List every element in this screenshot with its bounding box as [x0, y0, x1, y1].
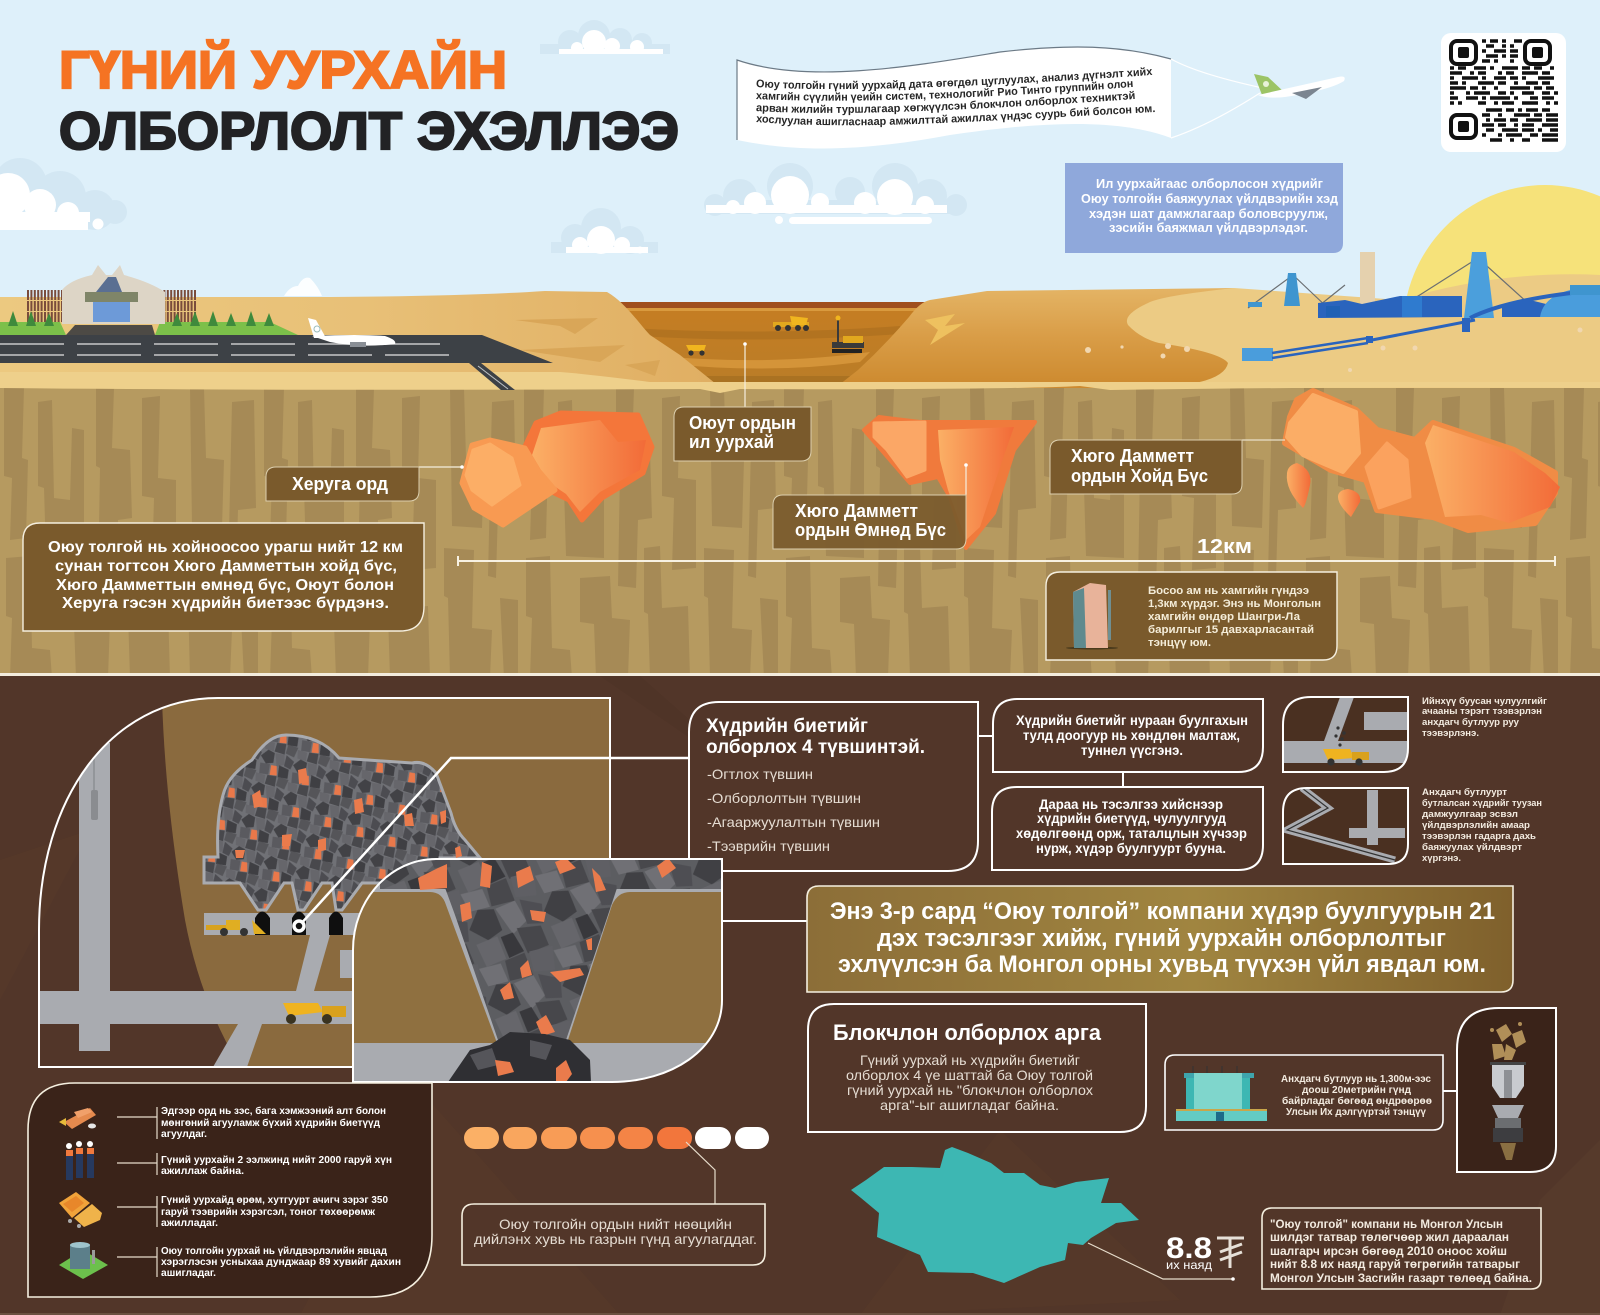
text box: shaft depth [1046, 572, 1337, 660]
text box: 12 km summary: Оюу толгой нь хойноосоо урагш нийт 12 км [48, 539, 403, 556]
sky background [0, 0, 1600, 400]
text box: top taxpayer: шалгарч ирсэн бөгөөд 2010 оноос хойш [1270, 1244, 1507, 1258]
text box: share underground: Оюу толгойн ордын нийт нөөцийн [499, 1216, 732, 1232]
icon: pit drill [832, 316, 864, 353]
mini panel: conveyor [1283, 788, 1408, 864]
panel: four levels: -Олборлолтын түвшин [707, 790, 861, 806]
panel: inset of drawpoint [353, 858, 722, 1082]
text box: top taxpayer: Монгол Улсын Засгийн газарт төлөөд байна. [1270, 1271, 1532, 1285]
separator line [0, 673, 1600, 676]
icon: underground haul truck [283, 1003, 346, 1024]
icon: workers [66, 1141, 94, 1180]
icon: copper ingots [59, 1108, 96, 1129]
text box: 12 km summary [23, 523, 424, 631]
processing plant [1248, 252, 1600, 318]
caption: loading: анхдагч бутлуур руу [1422, 716, 1520, 727]
callout: concentrator note [1065, 163, 1343, 253]
highlight box: historic event: эхлүүлсэн ба Монгол орны хувьд түүхэн үйл явдал юм. [838, 951, 1486, 978]
icon: state department store [1176, 1066, 1267, 1121]
text box: 12 km summary: Херуга гэсэн хүдрийн биетээс бүрдэнэ. [62, 595, 389, 612]
text box: primary crusher: байрладаг бөгөөд өндрөөрөө [1282, 1096, 1432, 1107]
icon: dump truck [59, 1192, 102, 1228]
text box: undercut tunnel: Хүдрийн биетийг нураан буулгахын [1016, 713, 1248, 728]
sun [1403, 185, 1600, 475]
label: Hugo Dummett South: Хюго Дамметт [795, 501, 918, 521]
text box: shaft depth: барилгыг 15 давхарласантай [1148, 624, 1314, 636]
row: vehicles: ажилладаг. [161, 1218, 218, 1229]
text box: blasting: Дараа нь тэсэлгээ хийснээр [1039, 797, 1223, 812]
underground soil [0, 388, 1600, 673]
text box: top taxpayer: нийт 8.8 их наяд гаруй төгрөгийн татварыг [1270, 1257, 1520, 1271]
open pit [605, 302, 925, 390]
right light sand [1090, 274, 1600, 392]
caption: conveyor: хүргэнэ. [1422, 852, 1461, 863]
panel: crusher [1457, 1008, 1556, 1172]
text box: 12 km summary: сунан тогтсон Хюго Дамметтын хойд бүс, [55, 558, 397, 575]
row: workforce: Гүний уурхайн 2 ээлжинд нийт 2000 гаруй хүн [161, 1155, 392, 1166]
label: Oyut open pit [674, 342, 811, 461]
caption: conveyor [1422, 786, 1542, 863]
text box: 12 km summary: Хюго Дамметтын өмнөд бүс, Оюут болон [56, 577, 394, 594]
text box: undercut tunnel [993, 699, 1263, 772]
title: ГҮНИЙ УУРХАЙН [59, 39, 507, 100]
panel: four levels: олборлох 4 түвшинтэй. [706, 737, 925, 758]
soil [162, 698, 610, 1067]
row: copper gold [117, 1105, 386, 1140]
hill bolt scar [925, 314, 965, 345]
ground strip above soil [0, 372, 726, 392]
callout: concentrator note: Оюу толгойн баяжуулах үйлдвэрийн хэд [1081, 192, 1338, 206]
banner text: Оюу толгойн гүний уурхайд дата өгөгдөл цуглуулах, анализ дүгнэлт хийх [756, 67, 1152, 92]
panel: four levels: -Агааржуулалтын түвшин [707, 814, 880, 830]
ore cave [204, 735, 480, 910]
icon: pit loader [773, 316, 809, 331]
text box: primary crusher: Анхдагч бутлуур нь 1,300м-ээс [1281, 1074, 1432, 1085]
text box: block caving: арга"-ыг ашигладаг байна. [880, 1097, 1059, 1113]
caption: conveyor: бутлалсан хүдрийг туузан [1422, 797, 1542, 808]
text box: shaft depth: 1,3км хүрдэг. Энэ нь Монголын [1148, 598, 1321, 610]
chart: eight pills, six filled [464, 1127, 769, 1149]
cloud: lower centre [551, 208, 658, 254]
callout: link lines [294, 736, 1123, 931]
title: ОЛБОРЛОЛТ ЭХЭЛЛЭЭ [59, 102, 679, 161]
label: Hugo Dummett South [773, 463, 968, 549]
callout: concentrator note: хэдэн шат дамжлагаар боловсруулж, [1089, 207, 1328, 221]
text box: top taxpayer: шилдэг татвар төлөгчөөр жил дараалан [1270, 1230, 1509, 1244]
icon: water recycling tank [59, 1242, 108, 1279]
caption: conveyor: тээвэрлэн гадарга дахь [1422, 830, 1536, 841]
panel: four levels: Хүдрийн биетийг [706, 716, 868, 737]
row: copper gold: мөнгөний агууламж бүхий хүдрийн биетүүд [161, 1117, 381, 1129]
banner text [756, 67, 1155, 128]
hoist [91, 758, 98, 820]
panel: four levels: -Тээврийн түвшин [707, 838, 830, 854]
text box: shaft depth: Босоо ам нь хамгийн гүндээ [1148, 585, 1309, 597]
text box: block caving [808, 1004, 1146, 1132]
highlight box: historic event [807, 886, 1513, 992]
icon: tugrik sign [1217, 1238, 1244, 1268]
highlight box: historic event: Энэ 3-р сард “Оюу толгой” компани хүдэр буулгуурын 21 [830, 898, 1495, 925]
label: Hugo Dummett North: Хюго Дамметт [1071, 446, 1194, 466]
text box: block caving: олборлох 4 үе шаттай ба Оюу толгой [846, 1067, 1093, 1083]
highlight box: historic event: дэх тэсэлгээг хийж, гүний уурхайн олборлолтыг [877, 925, 1446, 952]
label: Heruga [266, 465, 464, 501]
mini panel: loading truck [1283, 697, 1408, 772]
caption: conveyor: Анхдагч бутлуурт [1422, 786, 1507, 797]
QR code [1441, 33, 1566, 152]
text box: top taxpayer: "Оюу толгой" компани нь Монгол Улсын [1270, 1217, 1503, 1231]
label: Hugo Dummett North [1050, 440, 1285, 494]
callout: 8.8 trillion: их наяд [1166, 1258, 1212, 1272]
terminal building with grass [0, 265, 298, 335]
row: water reuse: хэрэглэсэн усныхаа дунджаар 89 хувийг дахин [161, 1257, 401, 1268]
text box: primary crusher: Улсын Их дэлгүүртэй тэнцүү [1286, 1107, 1427, 1118]
label: Hugo Dummett North: ордын Хойд Бүс [1071, 466, 1208, 486]
caption: loading: ачааны тэрэгт тээвэрлэн [1422, 705, 1542, 716]
caption: conveyor: баяжуулах үйлдвэрт [1422, 841, 1522, 852]
callout: concentrator note: зэсийн баяжмал үйлдвэрлэдэг. [1109, 221, 1308, 235]
text box: primary crusher [1165, 1055, 1457, 1130]
callout: concentrator note: Ил уурхайгаас олборлосон хүдрийг [1096, 177, 1323, 191]
runway [0, 335, 553, 390]
scale: 12 km: 12км [1197, 536, 1252, 558]
text box: undercut tunnel: туннел үүсгэнэ. [1081, 743, 1183, 758]
panel: four levels [689, 702, 978, 871]
text box: shaft depth: тэнцүү юм. [1148, 637, 1211, 649]
tunnels [39, 743, 369, 1067]
text box: blasting: хөдөлгөөнд орж, таталцлын хүчээр [1016, 826, 1247, 841]
ore chunks [418, 858, 676, 1036]
drawpoints [255, 912, 343, 935]
panel: four levels: -Огтлох түвшин [707, 766, 813, 782]
ore body: Hugo Dummett North [1285, 391, 1560, 530]
text box: top taxpayer [1262, 1208, 1541, 1289]
icon: crusher machine [1490, 1022, 1526, 1160]
caption: loading: тээвэрлэнэ. [1422, 727, 1479, 738]
text box: shaft depth: хамгийн өндөр Шангри-Ла [1148, 611, 1301, 623]
cloud: top centre [540, 20, 670, 54]
text box: share underground: дийлэнх хувь нь газрын гүнд агуулагддаг. [474, 1231, 757, 1247]
text box: primary crusher: доош 20метрийн гүнд [1302, 1085, 1412, 1096]
banner text: хамгийн сүүлийн үеийн систем, технологийг Рио Тинто группийн олон [756, 81, 1133, 103]
label: Oyut open pit: ил уурхай [689, 432, 774, 452]
text box: block caving: гүний уурхай нь "блокчлон олборлох [847, 1082, 1093, 1098]
row: water reuse: Оюу толгойн уурхай нь үйлдвэрлэлийн явцад [161, 1246, 388, 1257]
text box: blasting [992, 787, 1263, 870]
text box: undercut tunnel: тулд доогуур нь хөндлөн малтаж, [1023, 728, 1240, 743]
row: water reuse: ашигладаг. [161, 1268, 216, 1279]
right darker hill [830, 288, 1234, 392]
icon: underground loader [206, 920, 266, 936]
label: Heruga: Херуга орд [292, 474, 389, 494]
caption: loading [1422, 695, 1547, 738]
row: copper gold: Эдгээр орд нь зэс, бага хэмжээний алт болон [161, 1105, 386, 1117]
orange ore highlights in cave [235, 768, 462, 858]
row: vehicles [117, 1195, 388, 1229]
text box: blasting: хүдрийн биетүүд, чулуулгууд [1037, 811, 1226, 826]
ore body: Hugo Dummett South [864, 417, 1035, 548]
hill scars [515, 318, 660, 376]
ground edge [0, 382, 1600, 393]
caption: loading: Ийнхүү буусан чулуулгийг [1422, 695, 1547, 706]
icon: airplane towing banner [1254, 74, 1345, 99]
lower section background [0, 676, 1600, 1315]
icon: pit truck [686, 345, 706, 356]
label: Hugo Dummett South: ордын Өмнөд Бүс [795, 520, 946, 540]
text box: block caving: Блокчлон олборлох арга [833, 1020, 1102, 1045]
banner towed by plane [736, 46, 1260, 148]
cloud: middle [704, 163, 967, 224]
label: Oyut open pit: Оюут ордын [689, 413, 796, 433]
row: vehicles: гаруй тээврийн хэрэгсэл, тоног төхөөрөмж [161, 1207, 376, 1218]
callout: 8.8 trillion [1088, 1232, 1244, 1281]
text box: block caving: Гүний уурхай нь хүдрийн биетийг [860, 1052, 1080, 1068]
row: workforce [117, 1153, 392, 1177]
text box: blasting: нурж, хүдэр буулгуурт бууна. [1036, 841, 1226, 856]
scattered rocks [1085, 328, 1582, 372]
ore body: Heruga [462, 413, 652, 525]
cloud: left [0, 158, 127, 230]
row: copper gold: агуулдаг. [161, 1129, 207, 1140]
conveyor [1242, 318, 1475, 361]
banner text: хослуулан ашигласнаар амжилттай ажиллах үндэс суурь бий болсон юм. [756, 106, 1155, 128]
title [59, 39, 679, 161]
panel: mine cross-section [39, 698, 610, 1067]
rock pile [448, 1032, 591, 1082]
icon: Shangri-La tower [1066, 583, 1118, 650]
caption: conveyor: дамжуулгаар эсвэл [1422, 808, 1518, 819]
row: vehicles: Гүний уурхайд өрөм, хутгуурт ачигч зэрэг 350 [161, 1195, 388, 1206]
text box: share underground [462, 1142, 765, 1265]
panel: key facts [28, 1083, 432, 1297]
map: Mongolia [851, 1147, 1139, 1283]
row: water reuse [117, 1246, 401, 1279]
banner text: арван жилийн туршлагаар хөгжүүлсэн блокчлон олборлох техниктэй [756, 90, 1135, 116]
caption: conveyor: үйлдвэрлэлийн амаар [1422, 819, 1530, 830]
row: workforce: ажиллаж байна. [161, 1165, 244, 1177]
cloud: behind ground [284, 278, 322, 296]
left ground with hill [0, 291, 726, 392]
callout: 8.8 trillion: 8.8 [1166, 1232, 1212, 1265]
icon: parked airplane [308, 318, 395, 347]
